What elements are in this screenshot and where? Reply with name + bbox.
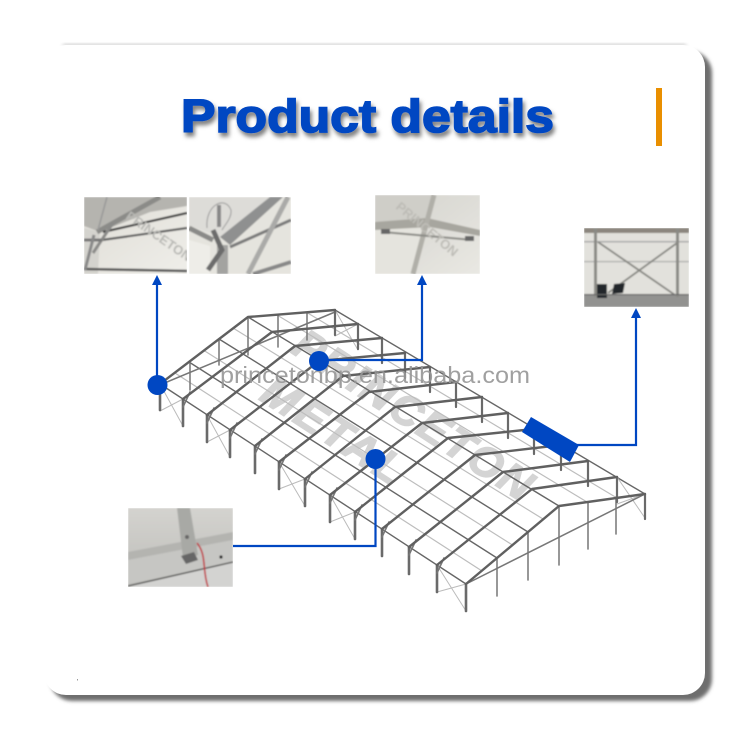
website watermark: princetonbp.en.alibaba.com (220, 362, 530, 388)
photo: roof corner with purlins (84, 197, 194, 274)
callout: end wall bracing (522, 308, 641, 462)
card panel (44, 43, 712, 701)
infographic canvas (49, 42, 715, 704)
orange accent bar (656, 88, 662, 146)
rafters (160, 310, 645, 584)
callout: eave connection (148, 275, 168, 395)
main posts, short side (335, 310, 645, 519)
callout: purlin bracket (233, 449, 386, 546)
photo: wall with cross bracing (584, 228, 689, 307)
photo: purlin bracket with red wire (128, 508, 233, 587)
light purlins (175, 312, 617, 571)
photo: ridge connector with cable (189, 197, 291, 274)
wall cross bracing (160, 310, 645, 611)
watermark: brand name: PRINCETON (285, 320, 542, 511)
photo: roof corner with purlins: PRINCETON (123, 208, 194, 264)
gable posts and ties (167, 312, 645, 596)
watermark: brand name: METAL (253, 367, 413, 495)
title: Product details (181, 90, 554, 142)
knee braces (183, 392, 444, 573)
main posts, long side (160, 384, 466, 611)
photo: roof brace joint (375, 195, 480, 274)
tent frame diagram (160, 310, 645, 611)
callout: ridge joint (309, 275, 427, 371)
dark purlins (160, 310, 645, 584)
photo: roof brace joint: PRINCETON (393, 199, 461, 259)
